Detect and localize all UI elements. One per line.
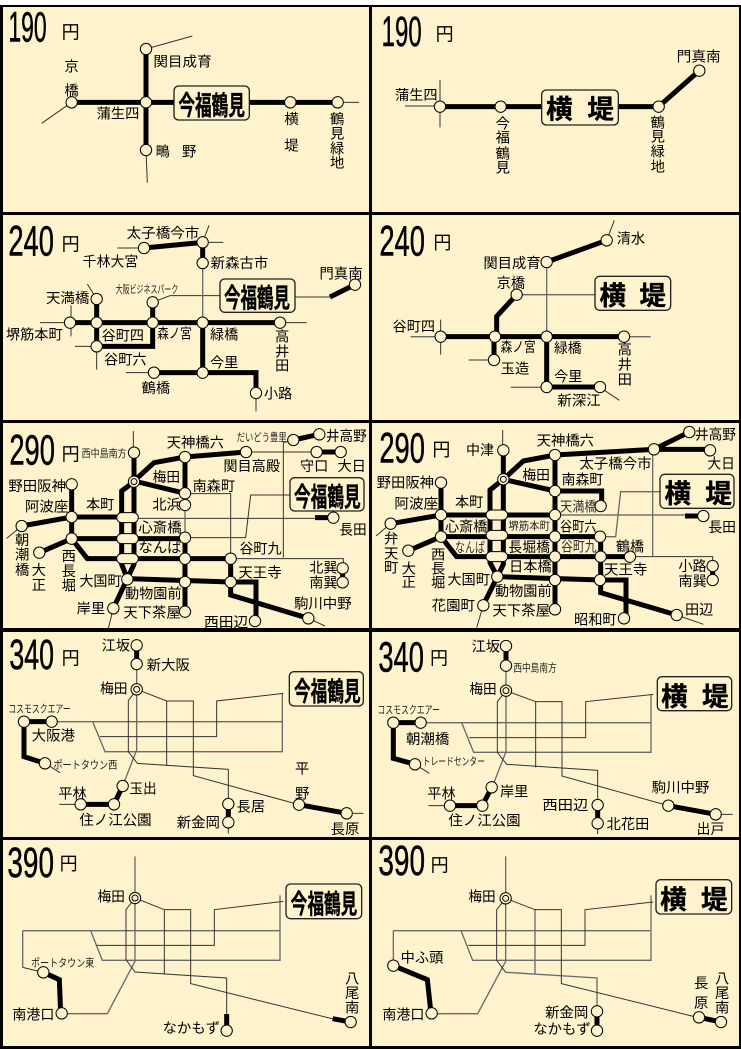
origin sign: Imafuku-Tsurumi [290, 478, 364, 512]
destination sign: Yokozutsumi: 横 [660, 885, 687, 915]
station names: 井 [275, 343, 289, 360]
station names: 梅田 [153, 469, 180, 486]
station names: 橋 [64, 83, 79, 100]
station names: 清水 [617, 231, 645, 248]
station names: 天満橋 [560, 499, 597, 516]
station names: 長堀橋 [508, 539, 550, 556]
station names: 大国町 [447, 571, 490, 588]
station names: 田 [275, 359, 289, 375]
panel: 390 yen from Imafuku-Tsurumi [7, 839, 362, 1037]
station names: 町 [384, 561, 398, 577]
station names: 高 [618, 342, 632, 359]
stations [385, 426, 718, 624]
origin sign: Imafuku-Tsurumi: 今福鶴見 [294, 677, 361, 707]
station names: 京 [64, 59, 79, 76]
station names: 尾 [715, 986, 729, 1002]
station names: 大阪港 [32, 728, 76, 745]
station names: 関目高殿 [223, 458, 280, 475]
station names [12, 888, 359, 1037]
station names: 長 [694, 976, 708, 992]
destination sign: Yokozutsumi: 堤 [705, 479, 732, 509]
station names: 大日 [707, 455, 735, 472]
station names: だいどう豊里 [237, 431, 287, 444]
station names: 朝潮橋 [406, 731, 449, 748]
station names: 見 [651, 130, 665, 146]
panel: 290 yen from Imafuku-Tsurumi [7, 427, 367, 631]
station names: 天下茶屋 [123, 605, 181, 622]
fare heading 240 yen: 円 [433, 233, 451, 253]
station names: 堺筋本町 [508, 519, 550, 532]
fare heading 390 yen: 円 [431, 856, 449, 876]
station names: なんば [138, 540, 182, 557]
station names: 田 [618, 373, 632, 389]
station names: 岸里 [500, 784, 528, 801]
station names: 地 [651, 159, 665, 176]
station names: コスモスクエアー [8, 704, 71, 716]
fare heading 190 yen: 190 [382, 8, 422, 56]
panel: 240 yen from Yokozutsumi [379, 217, 671, 410]
station names: 横 [284, 111, 299, 128]
fare heading 340 yen: 円 [62, 648, 80, 668]
station names: なかもず [533, 1021, 591, 1038]
station names: 堀 [62, 577, 76, 594]
station names: 関目成育 [483, 255, 541, 272]
station names: 小路 [678, 558, 707, 575]
station names: 動物園前 [125, 585, 182, 602]
station names: 西田辺 [542, 797, 588, 814]
destination sign: Yokozutsumi: 堤 [701, 885, 728, 915]
station names: 今里 [554, 368, 582, 385]
station names: 本町 [455, 494, 483, 511]
station names: 太子橋今市 [579, 455, 652, 472]
fare heading 240 yen: 240 [379, 217, 425, 265]
station names: 北浜 [152, 496, 181, 513]
station names: なかもず [163, 1020, 220, 1037]
station names: 谷町六 [560, 519, 597, 536]
fare heading 290 yen: 290 [9, 427, 55, 475]
station names: 昭和町 [574, 611, 617, 628]
station names: ポートタウン東 [31, 956, 95, 969]
station names: 平林 [58, 785, 87, 802]
station names: 谷町九 [239, 540, 282, 557]
station names: 梅田 [100, 680, 128, 697]
stations [66, 43, 343, 156]
destination sign: Yokozutsumi: 横 [599, 281, 626, 311]
station names: 尾 [345, 986, 359, 1002]
station names: ポートタウン西 [53, 759, 117, 771]
origin sign: Imafuku-Tsurumi: 今福鶴見 [178, 91, 245, 121]
destination sign: Yokozutsumi: 堤 [587, 94, 614, 124]
station names: 西中島南方 [82, 447, 127, 460]
station names: 北巽 [309, 560, 337, 577]
destination sign: Yokozutsumi [660, 474, 734, 509]
station names: 大阪ビジネスパーク [116, 283, 178, 296]
station names: 高 [275, 328, 289, 345]
station names: 大 [32, 562, 46, 579]
route lines [411, 220, 651, 400]
transfer pills [117, 513, 138, 564]
station names: 見 [330, 126, 344, 142]
station names: 動物園前 [495, 583, 552, 600]
station names: 見 [496, 160, 510, 176]
fare heading 240 yen: 240 [8, 217, 54, 265]
station names: 門真南 [319, 266, 363, 283]
station names: 平林 [427, 785, 456, 802]
station names: 南港口 [382, 1007, 424, 1024]
station names: 正 [402, 575, 416, 591]
station names: 新森古市 [211, 255, 268, 272]
origin sign: Imafuku-Tsurumi [220, 279, 295, 314]
station names: 潮 [15, 546, 29, 563]
station names: 南 [715, 999, 729, 1016]
route lines [393, 856, 721, 1031]
station names: 南巽 [309, 575, 337, 592]
destination sign: Yokozutsumi: 横 [664, 479, 691, 509]
station names: 西中島南方 [513, 662, 557, 675]
panel: 290 yen from Yokozutsumi [376, 425, 736, 628]
station names [382, 888, 729, 1038]
panel: 190 yen from Yokozutsumi [382, 8, 721, 176]
route lines [393, 646, 733, 834]
station names: 田辺 [685, 601, 713, 618]
station names: 橋 [15, 562, 29, 579]
station names: 北花田 [607, 816, 649, 833]
station names: 森ノ宮 [501, 339, 536, 356]
station names: 大国町 [79, 573, 122, 590]
station names [377, 426, 736, 628]
fare heading 390 yen: 390 [378, 837, 425, 885]
station names: 八 [715, 972, 729, 988]
station names: 中ふ頭 [401, 949, 443, 966]
station names: 太子橋今市 [127, 225, 199, 242]
station names: 今 [496, 115, 510, 132]
station names: 大日 [337, 458, 366, 475]
origin sign: Imafuku-Tsurumi [286, 884, 362, 919]
stations [388, 640, 721, 829]
station names: 原 [694, 996, 708, 1012]
panel: 190 yen from Imafuku-Tsurumi [8, 4, 359, 183]
station names: 天 [384, 546, 398, 562]
station names: 千林大宮 [83, 253, 138, 270]
station names: 心斎橋 [138, 520, 182, 537]
station names: 江坂 [472, 639, 500, 656]
station names: 鶴 [330, 111, 344, 128]
station names [64, 54, 344, 172]
route lines [23, 856, 351, 1031]
fare heading 290 yen: 290 [379, 425, 425, 473]
station names: 阿波座 [394, 496, 438, 513]
station names: 朝 [15, 532, 29, 549]
station names: 小路 [264, 385, 292, 402]
station names: 八 [345, 972, 359, 988]
fare heading 390 yen: 円 [60, 854, 78, 874]
station names [6, 225, 363, 402]
station names: 福 [496, 130, 510, 147]
fare heading 240 yen: 円 [62, 235, 80, 255]
station names: トレードセンター [423, 756, 485, 768]
station names: なんば [455, 540, 485, 557]
station names: 出戸 [697, 821, 724, 838]
fare heading 190 yen: 190 [8, 4, 47, 52]
station names: 玉造 [501, 361, 529, 378]
station names: 平 [295, 761, 309, 777]
station names: 江坂 [102, 638, 130, 655]
station names: 南港口 [12, 1007, 54, 1024]
station names: 蒲生四 [97, 105, 139, 122]
route lines [42, 36, 359, 183]
destination sign: Yokozutsumi [656, 880, 732, 915]
station names: コスモスクエアー [377, 704, 440, 716]
fare heading 290 yen: 円 [432, 440, 450, 460]
station names: 長 [62, 564, 76, 580]
station names: 蒲生四 [395, 87, 438, 104]
station names: 阿波座 [25, 499, 68, 516]
station names: 心斎橋 [445, 519, 487, 536]
station names: 新金岡 [177, 815, 220, 832]
origin sign: Imafuku-Tsurumi [174, 86, 249, 121]
station names: 緑 [330, 140, 344, 157]
station names: 井高野 [695, 426, 736, 443]
route lines [376, 430, 713, 628]
station names: 緑橋 [554, 340, 582, 357]
station names: 天王寺 [604, 561, 647, 578]
fare heading 340 yen: 円 [430, 649, 448, 669]
station names [377, 639, 724, 838]
station names [395, 49, 721, 176]
station names: 長田 [339, 522, 367, 538]
station names: 天神橋六 [167, 435, 224, 452]
fare heading 290 yen: 円 [62, 444, 80, 464]
panel: 390 yen from Yokozutsumi [378, 837, 732, 1038]
station names: 玉出 [129, 780, 157, 797]
station names: 緑 [651, 144, 665, 161]
station names: 鶴橋 [142, 380, 170, 397]
station names: 地 [330, 155, 344, 172]
panel: 240 yen from Imafuku-Tsurumi [6, 217, 363, 411]
station names: 井 [618, 357, 632, 374]
transfer pills [486, 510, 508, 562]
station names: 緑橋 [210, 327, 238, 344]
station names: 大 [402, 561, 416, 578]
station names: 南森町 [562, 471, 603, 488]
station names [8, 638, 359, 838]
route lines [405, 71, 699, 127]
station names: 京橋 [497, 275, 525, 292]
station names: 堺筋本町 [6, 327, 63, 344]
station names: 梅田 [468, 888, 496, 905]
stations [434, 65, 705, 112]
station names: 花園町 [432, 597, 475, 614]
origin sign: Imafuku-Tsurumi: 今福鶴見 [224, 284, 290, 314]
station names: 谷町四 [393, 318, 435, 335]
stations [16, 429, 348, 627]
station names: 南 [345, 999, 359, 1016]
station names: 中津 [466, 442, 494, 459]
station names: 関目成育 [153, 54, 212, 71]
station names: 新深江 [557, 393, 601, 410]
station names: 駒川中野 [294, 595, 352, 612]
station names: 天下茶屋 [492, 602, 550, 619]
station names: 梅田 [469, 681, 497, 698]
route lines [7, 431, 343, 628]
destination sign: Yokozutsumi: 横 [546, 94, 573, 124]
destination sign: Yokozutsumi [595, 276, 671, 311]
station names: 野田阪神 [377, 475, 434, 492]
station names: 谷町四 [102, 327, 144, 344]
station names: 今里 [210, 354, 238, 371]
station names: 梅田 [522, 467, 550, 484]
station names: 天神橋六 [537, 432, 594, 449]
station names: 谷町九 [561, 539, 597, 556]
route lines [24, 646, 363, 833]
station names: 谷町六 [104, 352, 147, 369]
station names [393, 231, 645, 410]
station names: 鶴 [496, 145, 510, 162]
destination sign: Yokozutsumi [542, 90, 618, 125]
station names: 新金岡 [545, 1004, 588, 1021]
station names: 野田阪神 [8, 478, 66, 495]
station names: 野 [182, 144, 196, 161]
station names: 長 [431, 562, 445, 578]
station names: 西田辺 [204, 614, 248, 631]
station names: 南巽 [678, 573, 707, 590]
station names: 岸里 [77, 601, 105, 618]
station names: 南森町 [193, 478, 235, 495]
fare heading 340 yen: 340 [9, 631, 54, 679]
station names: 鶴橋 [616, 539, 644, 556]
station names: 森ノ宮 [157, 325, 192, 342]
destination sign: Yokozutsumi: 堤 [702, 682, 729, 712]
stations [18, 640, 352, 828]
station names: 日本橋 [509, 559, 552, 576]
station names: 天王寺 [238, 565, 282, 582]
station names: 駒川中野 [652, 779, 709, 796]
station names: 鶴 [651, 114, 665, 131]
stations [435, 235, 630, 393]
station names: 弁 [384, 531, 398, 548]
stations [38, 892, 356, 1036]
station names: 正 [32, 578, 46, 594]
route lines [40, 225, 355, 411]
station names: 住ノ江公園 [448, 813, 521, 830]
station names: 西 [62, 549, 76, 565]
origin sign: Imafuku-Tsurumi: 今福鶴見 [291, 889, 357, 919]
station names: 天満橋 [46, 290, 89, 307]
stations [64, 237, 361, 399]
fare heading 190 yen: 円 [62, 23, 80, 43]
station names: 井高野 [326, 428, 367, 445]
fare heading 340 yen: 340 [378, 633, 424, 681]
station names: 住ノ江公園 [79, 812, 152, 829]
panel: 340 yen from Imafuku-Tsurumi [8, 631, 363, 838]
station names: 堀 [431, 575, 445, 592]
panel: 340 yen from Yokozutsumi [377, 633, 733, 838]
station names: 西 [431, 547, 445, 563]
station names: 長田 [708, 520, 736, 536]
station names: 守口 [300, 458, 328, 475]
origin sign: Imafuku-Tsurumi: 今福鶴見 [294, 482, 361, 512]
station names: 梅田 [97, 888, 125, 905]
stations [388, 893, 727, 1036]
destination sign: Yokozutsumi: 堤 [639, 281, 666, 311]
fare heading 390 yen: 390 [7, 839, 54, 887]
station names: 長居 [237, 800, 265, 816]
station names: 本町 [86, 496, 114, 513]
station names: 門真南 [677, 49, 721, 66]
station names: 鴫 [156, 144, 170, 161]
destination sign: Yokozutsumi: 横 [661, 682, 688, 712]
station names: 長原 [331, 822, 359, 838]
station names: 堤 [284, 138, 299, 155]
station names: 新大阪 [147, 657, 190, 674]
destination sign: Yokozutsumi [657, 677, 732, 712]
station names [8, 428, 367, 631]
origin sign: Imafuku-Tsurumi [289, 672, 363, 707]
station names: 野 [295, 785, 309, 802]
fare heading 190 yen: 円 [436, 25, 454, 45]
